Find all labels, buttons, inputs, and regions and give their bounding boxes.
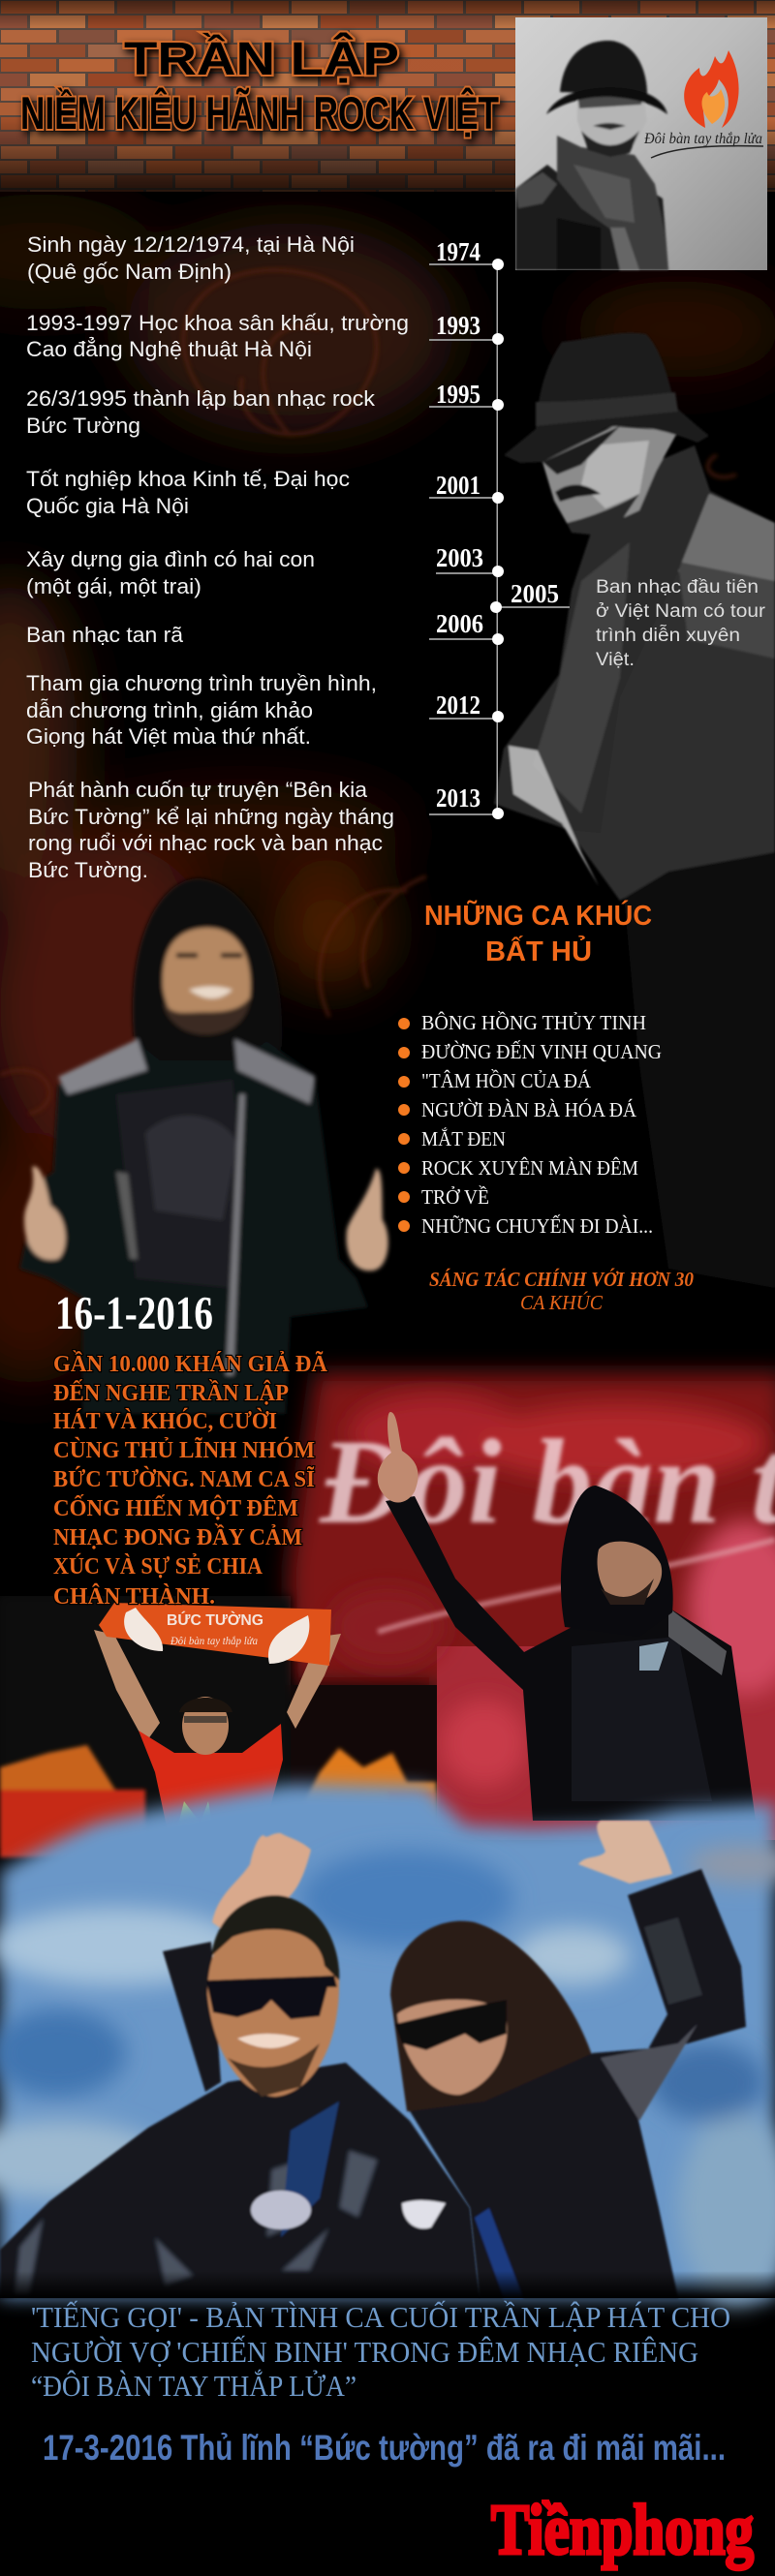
list of immortal songs: ĐƯỜNG ĐẾN VINH QUANG	[421, 1040, 662, 1063]
callout: 2005 note: Việt.	[596, 650, 635, 670]
timeline descriptions: 1993-1997 Học khoa sân khấu, trường	[26, 311, 409, 335]
timeline descriptions: Sinh ngày 12/12/1974, tại Hà Nội	[27, 232, 355, 257]
singer	[378, 1412, 756, 1821]
timeline years: 2005	[511, 579, 559, 608]
timeline years: 2003	[436, 543, 483, 572]
callout: 2005 note: trình diễn xuyên	[596, 625, 740, 646]
heading: songs	[424, 899, 652, 967]
closing caption	[31, 2299, 730, 2403]
jacket	[569, 491, 775, 901]
concert description: ĐẾN NGHE TRẦN LẬP	[53, 1380, 289, 1406]
woman in sunglasses	[390, 1821, 746, 2298]
closing caption: “ĐÔI BÀN TAY THẮP LỬA”	[31, 2369, 356, 2403]
timeline axis	[429, 259, 570, 819]
closing caption: NGƯỜI VỢ 'CHIẾN BINH' TRONG ĐÊM NHẠC RIÊNG	[31, 2335, 698, 2369]
hat	[504, 333, 709, 463]
timeline years: 1995	[436, 380, 480, 409]
timeline descriptions: Bức Tường” kể lại những ngày tháng	[28, 805, 394, 829]
timeline descriptions: (một gái, một trai)	[26, 574, 202, 598]
scarf: Đôi bàn tay thắp lửa	[170, 1634, 258, 1647]
script text: Đôi bàn tay thắp lửa: Đôi bàn tay thắp lửa	[643, 131, 762, 147]
list of immortal songs: BÔNG HỒNG THỦY TINH	[421, 1011, 646, 1034]
brick wall header	[0, 0, 775, 192]
large black and white portrait behind the timeline	[494, 333, 775, 1288]
list of immortal songs: "TÂM HỒN CỦA ĐÁ	[421, 1069, 592, 1092]
man in sunglasses	[0, 1833, 480, 2298]
concert description: NHẠC ĐONG ĐẦY CẢM	[53, 1524, 302, 1550]
timeline years: 2012	[436, 690, 480, 720]
scarf	[99, 1603, 331, 1666]
timeline years: 1993	[436, 311, 480, 340]
flame background texture	[0, 194, 775, 1385]
fan figure	[94, 1630, 341, 1840]
timeline years	[436, 237, 559, 813]
note: over 30 songs	[429, 1268, 694, 1314]
timeline years: 2006	[436, 609, 483, 638]
timeline descriptions	[26, 232, 409, 882]
heading: songs: NHỮNG CA KHÚC	[424, 899, 652, 932]
timeline descriptions: Tham gia chương trình truyền hình,	[26, 671, 377, 695]
timeline descriptions: Bức Tường.	[28, 858, 148, 882]
timeline descriptions: (Quê gốc Nam Định)	[27, 260, 232, 284]
list of immortal songs	[398, 1011, 662, 1238]
callout: 2005 note: ở Việt Nam có tour	[596, 601, 766, 622]
timeline descriptions: Bức Tường	[26, 414, 140, 438]
list of immortal songs: MẮT ĐEN	[421, 1127, 506, 1150]
timeline descriptions: Ban nhạc tan rã	[26, 623, 183, 647]
face	[542, 426, 678, 533]
list of immortal songs: TRỞ VỀ	[421, 1185, 489, 1209]
icon: right thumb up	[346, 1169, 388, 1271]
photo: blue mountains with the couple waving	[0, 1784, 775, 2305]
photo: concert stage with Trần Lập raising his arm	[289, 1373, 775, 1840]
date: 16-1-2016: 16-1-2016	[55, 1286, 213, 1339]
timeline descriptions: Giọng hát Việt mùa thứ nhất.	[26, 724, 311, 749]
concert description: XÚC VÀ SỰ SẺ CHIA	[53, 1554, 264, 1579]
timeline descriptions: Cao đẳng Nghệ thuật Hà Nội	[26, 337, 312, 361]
concert description	[53, 1351, 328, 1610]
timeline descriptions: Quốc gia Hà Nội	[26, 494, 189, 518]
note: over 30 songs: CA KHÚC	[520, 1291, 604, 1314]
heading: songs: BẤT HỦ	[485, 935, 592, 967]
title: NIỀM KIÊU HÃNH ROCK VIỆT	[20, 87, 499, 138]
timeline years: 2013	[436, 783, 480, 813]
timeline descriptions: 26/3/1995 thành lập ban nhạc rock	[26, 386, 376, 411]
list of immortal songs: ROCK XUYÊN MÀN ĐÊM	[421, 1156, 638, 1180]
concert description: CỐNG HIẾN MỘT ĐÊM	[53, 1495, 298, 1521]
concert description: CHÂN THÀNH.	[53, 1583, 215, 1610]
concert description: BỨC TƯỜNG. NAM CA SĨ	[53, 1466, 315, 1492]
scarf: BỨC TƯỜNG	[167, 1610, 264, 1629]
photo: Trần Lập in black hat with flame logo	[515, 17, 767, 270]
timeline descriptions: Tốt nghiệp khoa Kinh tế, Đại học	[26, 467, 350, 491]
stage backdrop lettering: Đôi bàn t	[319, 1416, 775, 1549]
list of immortal songs: NGƯỜI ĐÀN BÀ HÓA ĐÁ	[421, 1098, 637, 1121]
concert description: HÁT VÀ KHÓC, CƯỜI	[53, 1408, 277, 1434]
photo: fan holding Bức Tường scarf	[0, 1596, 437, 1857]
scarf	[494, 445, 710, 833]
callout: 2005 note	[596, 577, 766, 670]
timeline years: 1974	[436, 237, 480, 266]
timeline descriptions: Phát hành cuốn tự truyện “Bên kia	[28, 778, 367, 802]
concert description: GẦN 10.000 KHÁN GIẢ ĐÃ	[53, 1351, 328, 1377]
timeline descriptions: Xây dựng gia đình có hai con	[26, 547, 315, 571]
icon: flame logo	[684, 50, 739, 128]
concert description: CÙNG THỦ LĨNH NHÓM	[53, 1437, 315, 1463]
list of immortal songs: NHỮNG CHUYẾN ĐI DÀI...	[421, 1214, 653, 1238]
photo: smiling Trần Lập in hood, thumbs up	[19, 878, 388, 1414]
timeline descriptions: dẫn chương trình, giám khảo	[26, 698, 313, 722]
timeline years: 2001	[436, 471, 480, 500]
title	[20, 32, 499, 138]
timeline descriptions: rong ruổi với nhạc rock và ban nhạc	[28, 831, 383, 855]
title: TRẦN LẬP	[124, 32, 399, 85]
callout: 2005 note: Ban nhạc đầu tiên	[596, 577, 759, 598]
closing caption: 'TIẾNG GỌI' - BẢN TÌNH CA CUỐI TRẦN LẬP HÁT CHO	[31, 2299, 730, 2334]
trousers	[620, 755, 775, 1288]
icon: left thumb up	[24, 1166, 66, 1260]
note: over 30 songs: SÁNG TÁC CHÍNH VỚI HƠN 30	[429, 1268, 694, 1291]
